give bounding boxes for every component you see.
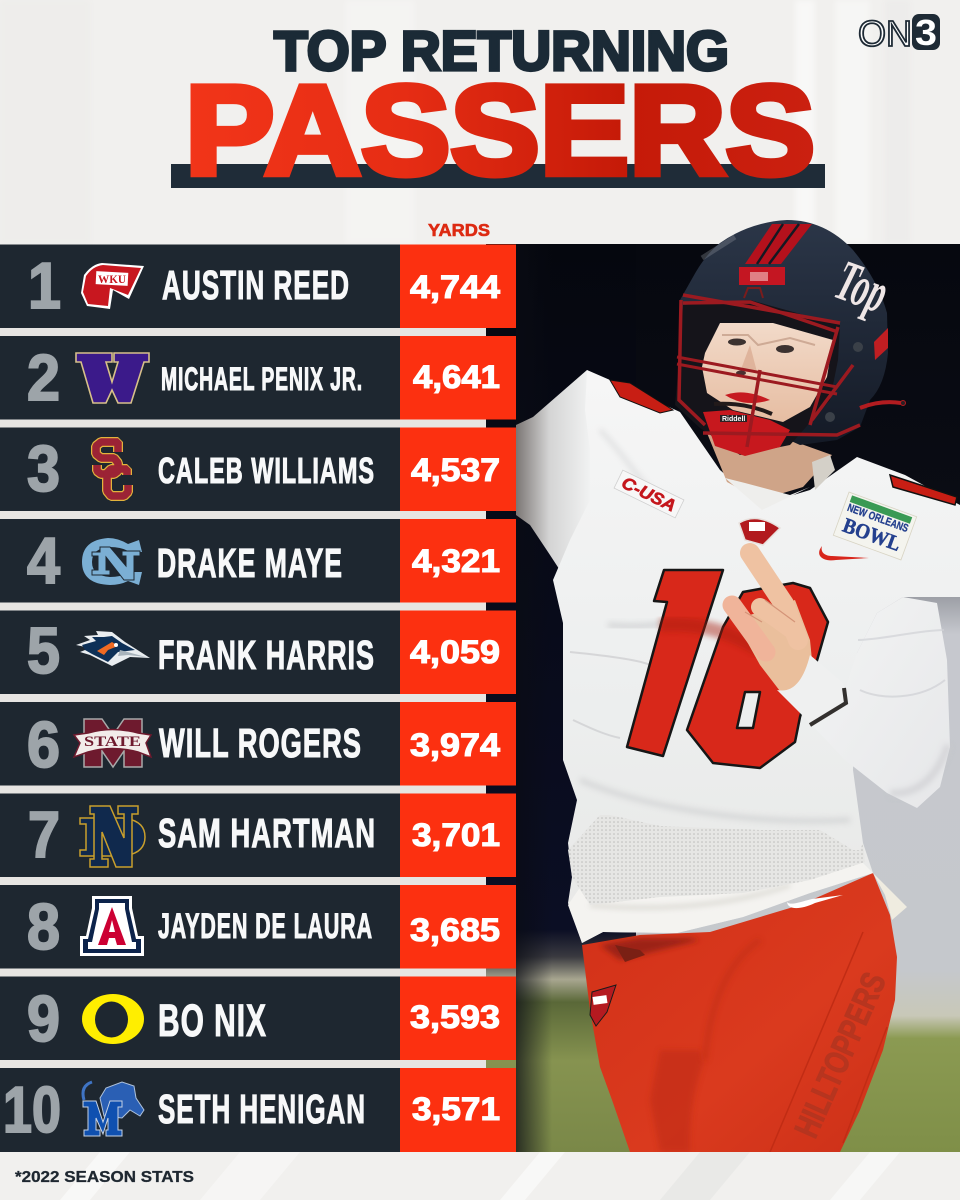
jersey side flap xyxy=(873,873,907,920)
row 5: frank harris: 5 xyxy=(27,614,60,687)
wrist band xyxy=(777,655,847,725)
row 4: drake maye: DRAKE MAYE xyxy=(157,540,343,586)
footnote: *2022 SEASON STATS xyxy=(15,1169,194,1186)
row 3: caleb williams: 3 xyxy=(27,432,60,505)
ranking table xyxy=(0,244,516,1152)
patch: new orleans bowl: NEW ORLEANS xyxy=(846,502,910,535)
right shoulder number xyxy=(890,475,957,505)
facemask xyxy=(677,295,901,447)
row 8: jayden de laura: 8 xyxy=(27,890,60,963)
pants wku patch xyxy=(590,985,616,1026)
helmet red stripes xyxy=(745,224,812,264)
row 6: will rogers: WILL ROGERS xyxy=(159,720,362,766)
row 3: caleb williams: CALEB WILLIAMS xyxy=(158,450,375,491)
title: passers: PASSERS xyxy=(185,59,815,201)
patch: c-usa: C-USA xyxy=(619,473,679,516)
row 10: seth henigan: SETH HENIGAN xyxy=(158,1086,366,1132)
right arm sleeve xyxy=(853,597,950,808)
row 6: will rogers xyxy=(0,702,516,786)
hand xyxy=(732,553,813,697)
patch: new orleans bowl: BOWL xyxy=(840,513,904,556)
row 2: michael penix jr xyxy=(0,336,516,420)
row 1: austin reed xyxy=(0,244,516,328)
logo: utsa xyxy=(76,631,150,666)
logo: On3: 3 xyxy=(915,12,937,53)
jersey folds xyxy=(570,430,850,821)
row 10: seth henigan xyxy=(0,1068,516,1152)
row 9: bo nix xyxy=(0,976,516,1060)
patch: new orleans bowl xyxy=(833,492,917,560)
row 9: bo nix: BO NIX xyxy=(158,995,267,1046)
neck and collar xyxy=(707,433,835,510)
jersey torso xyxy=(553,370,960,943)
photo background xyxy=(486,244,960,1152)
row 4: drake maye: 4 xyxy=(27,524,60,597)
row 9: bo nix: 3,593 xyxy=(410,999,500,1035)
light strips between rows xyxy=(0,328,486,1068)
pants xyxy=(582,873,897,1152)
row 7: sam hartman: 3,701 xyxy=(412,817,500,853)
row 10: seth henigan: 10 xyxy=(3,1073,61,1146)
row 2: michael penix jr: MICHAEL PENIX JR. xyxy=(161,361,363,397)
logo: oregon xyxy=(82,994,144,1044)
row 5: frank harris: FRANK HARRIS xyxy=(158,632,375,678)
row 8: jayden de laura xyxy=(0,885,516,968)
row 5: frank harris xyxy=(0,610,516,694)
title: top returning: TOP RETURNING xyxy=(274,19,729,82)
helmet hardware xyxy=(825,328,906,422)
row 8: jayden de laura: JAYDEN DE LAURA xyxy=(158,907,373,946)
helmet tops script: Top xyxy=(828,247,897,325)
face xyxy=(702,323,833,422)
row 8: jayden de laura: 3,685 xyxy=(410,912,500,948)
patch: wku xyxy=(739,519,780,545)
jersey number 1 xyxy=(627,570,723,756)
logo: On3: ON xyxy=(858,13,912,54)
logo: usc xyxy=(96,442,128,496)
logo: wku xyxy=(81,263,144,309)
logo: mississippi state xyxy=(74,719,151,767)
row 2: michael penix jr: 4,641 xyxy=(413,359,500,395)
logo: notre dame xyxy=(80,806,145,867)
chin strap xyxy=(860,402,901,408)
row 7: sam hartman: SAM HARTMAN xyxy=(158,810,376,856)
player photo illustration xyxy=(516,220,960,1152)
row 1: austin reed: AUSTIN REED xyxy=(162,262,350,308)
row 9: bo nix: 9 xyxy=(27,982,60,1055)
chest swoosh xyxy=(819,546,869,560)
logo: north carolina xyxy=(82,538,142,585)
pants swoosh xyxy=(787,895,843,908)
row 7: sam hartman xyxy=(0,794,516,877)
row 6: will rogers: 6 xyxy=(27,708,60,781)
row 4: drake maye xyxy=(0,519,516,602)
chin cup xyxy=(703,410,790,456)
logo: memphis xyxy=(83,1082,144,1136)
patch: c-usa xyxy=(614,470,684,518)
column heading: yards: YARDS xyxy=(428,220,490,240)
row 1: austin reed: 1 xyxy=(28,249,61,322)
row 6: will rogers: 3,974 xyxy=(410,727,500,763)
left arm fading sleeve xyxy=(516,370,590,568)
logo: arizona xyxy=(80,896,144,956)
logo: washington xyxy=(76,353,149,403)
row 1: austin reed: 4,744 xyxy=(410,269,500,305)
row 3: caleb williams xyxy=(0,428,516,511)
shoulder stripe xyxy=(610,380,673,413)
helmet xyxy=(675,220,897,455)
logo: On3 xyxy=(858,12,940,54)
pants lettering: HILLTOPPERS xyxy=(788,967,894,1143)
chin cup: Riddell xyxy=(722,416,745,423)
logo: wku: WKU xyxy=(98,272,126,286)
row 7: sam hartman: 7 xyxy=(28,798,60,871)
mesh panel xyxy=(568,815,865,905)
row 3: caleb williams: 4,537 xyxy=(411,452,500,488)
row 10: seth henigan: 3,571 xyxy=(412,1091,500,1127)
row 5: frank harris: 4,059 xyxy=(410,634,500,670)
logo: mississippi state: STATE xyxy=(84,734,141,750)
title underline bar xyxy=(171,164,825,188)
jersey number 6 xyxy=(687,583,828,768)
row 4: drake maye: 4,321 xyxy=(412,543,500,579)
hem fold xyxy=(568,860,873,943)
row 2: michael penix jr: 2 xyxy=(27,341,60,414)
